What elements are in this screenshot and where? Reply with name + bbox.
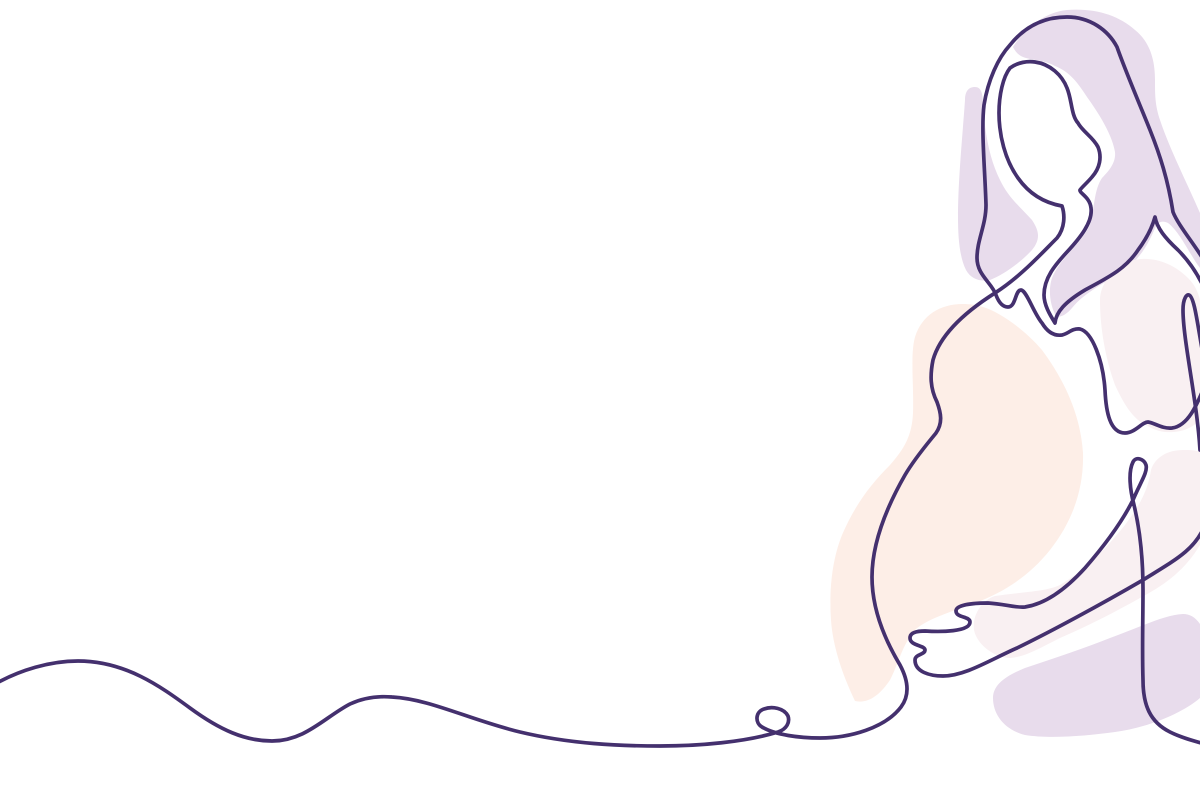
blob: belly peach: [830, 304, 1083, 702]
blob: lap lilac: [993, 614, 1200, 737]
blob: chest pale pink: [1100, 259, 1200, 432]
blob: hair left lilac: [958, 87, 1038, 281]
blob: hair main lilac: [1013, 10, 1200, 317]
line: arm, hand and leg: [910, 459, 1200, 744]
blob: arm pale pink: [974, 450, 1200, 658]
line: outer hair and neckline: [977, 17, 1200, 433]
line: strap: [1183, 295, 1200, 450]
